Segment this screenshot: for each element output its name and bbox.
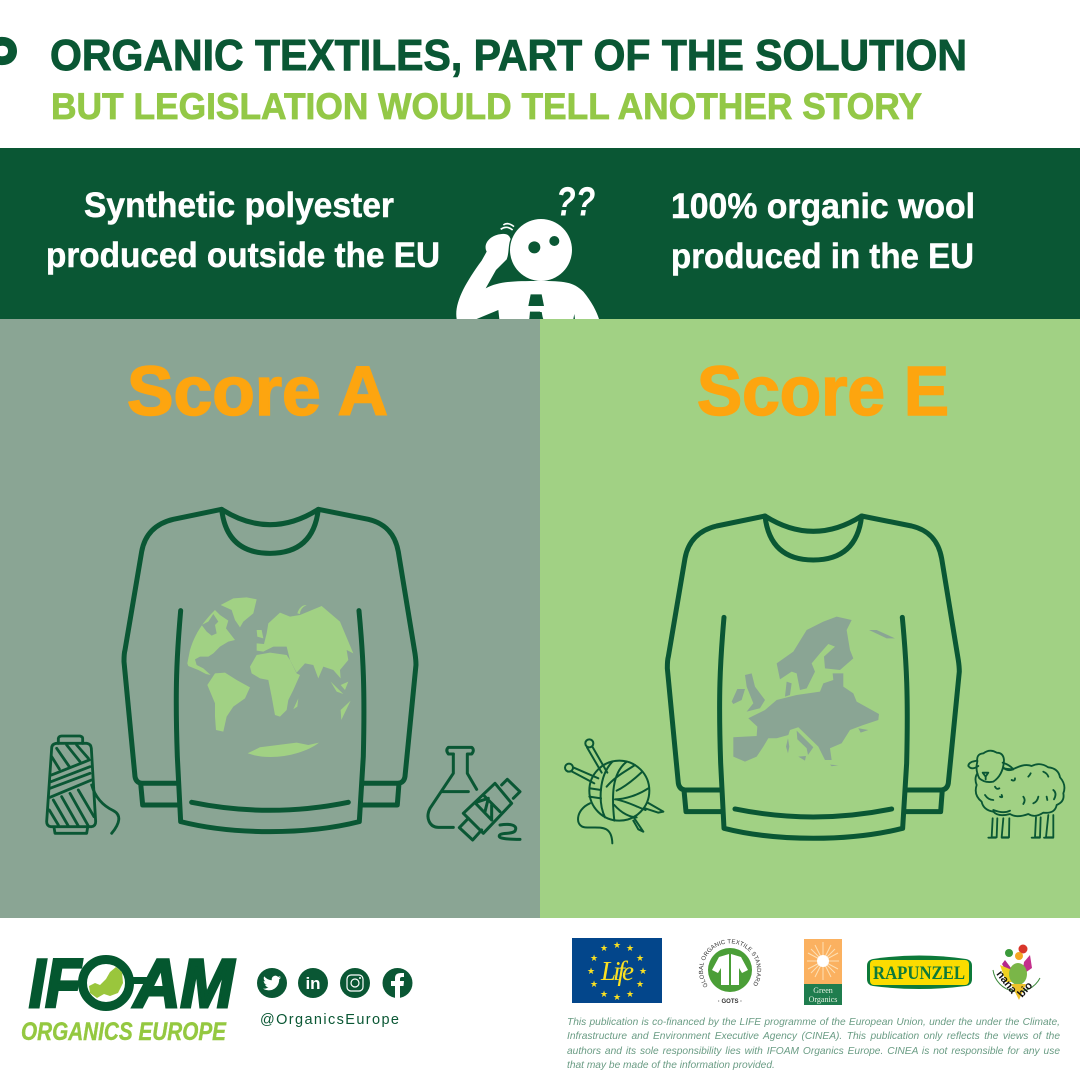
icon: yarn ball with needles xyxy=(565,739,663,843)
panel: Score E xyxy=(540,319,1080,918)
panel: Score A xyxy=(0,319,540,918)
header band xyxy=(0,148,1080,319)
logo: EU LIFE: ★ xyxy=(639,966,647,976)
band text: organic wool: produced in the EU xyxy=(671,237,974,276)
logo: Green Organics: Organics xyxy=(809,995,837,1004)
heading: Score E: Score E xyxy=(697,352,949,430)
logo: EU LIFE: ★ xyxy=(613,992,621,1002)
Europe map xyxy=(732,617,895,766)
sweater outline xyxy=(124,509,416,832)
heading: Score A: Score A xyxy=(127,352,388,430)
band text: organic wool: 100% organic wool xyxy=(671,187,975,226)
band text: synthetic polyester: produced outside the EU xyxy=(46,236,440,275)
icon: puzzled person xyxy=(456,179,599,319)
title: ORGANIC TEXTILES, PART OF THE SOLUTION xyxy=(50,31,967,80)
logo: Green Organics xyxy=(804,939,842,1005)
icon: flask and synthetic thread xyxy=(428,747,520,840)
logo: EU LIFE: Life xyxy=(600,956,634,986)
logo: IFOAM Organics Europe: AM xyxy=(132,945,235,1022)
sweater outline xyxy=(667,516,959,838)
logo: EU LIFE: ★ xyxy=(636,953,644,963)
logo: Rapunzel: RAPUNZEL xyxy=(873,963,965,984)
sweater with Europe map xyxy=(667,516,959,838)
band text: organic wool xyxy=(671,187,975,276)
icon: puzzled person: ?? xyxy=(556,179,595,225)
logo: IFOAM Organics Europe: IF xyxy=(29,945,83,1022)
logo: GOTS: · GOTS · xyxy=(718,999,742,1005)
world map xyxy=(187,597,353,757)
logo: EU LIFE: ★ xyxy=(590,953,598,963)
band text: synthetic polyester xyxy=(46,186,440,275)
icon: sheep xyxy=(968,751,1064,838)
logo: nana bio xyxy=(993,944,1040,1000)
icon: linkedin: in xyxy=(305,974,321,993)
logo: nana bio: nana xyxy=(994,968,1019,997)
sweater with world map xyxy=(124,509,416,832)
cropped logo fragment xyxy=(0,37,17,65)
logo: IFOAM Organics Europe: ORGANICS EUROPE xyxy=(21,1018,227,1046)
logo: EU LIFE: ★ xyxy=(613,940,621,950)
icon: thread spool xyxy=(47,736,119,833)
icon: facebook xyxy=(382,968,412,998)
logo: EU LIFE: ★ xyxy=(590,979,598,989)
logo: Rapunzel xyxy=(867,956,972,989)
logo: Green Organics: Green xyxy=(813,986,833,995)
subtitle: BUT LEGISLATION WOULD TELL ANOTHER STORY xyxy=(51,86,922,127)
logo: EU LIFE: ★ xyxy=(636,979,644,989)
icon: twitter xyxy=(257,968,287,998)
logo: nana bio: bio xyxy=(1015,980,1035,1000)
logo: EU LIFE: ★ xyxy=(600,943,608,953)
disclaimer text: This publication is co-financed by the LIFE programme of the European Union, under the under the Climate, Infrastructure and Environment Executive Agency (CINEA). This publication only reflects the views of the authors and its sole responsibility lies with IFOAM Organics Europe. CINEA is not responsible for any use that may be made of the information provided. xyxy=(567,1017,1060,1071)
social handle: @OrganicsEurope xyxy=(260,1012,399,1028)
logo: EU LIFE: ★ xyxy=(626,943,634,953)
logo: EU LIFE xyxy=(572,938,662,1003)
band text: synthetic polyester: Synthetic polyester xyxy=(84,186,394,225)
social icons xyxy=(257,968,412,998)
logo: GOTS: GLOBAL ORGANIC TEXTILE STANDARD xyxy=(698,939,762,988)
icon: instagram xyxy=(340,968,370,998)
icon: linkedin xyxy=(298,968,328,998)
logo: EU LIFE: ★ xyxy=(600,989,608,999)
logo: EU LIFE: ★ xyxy=(587,966,595,976)
logo: IFOAM Organics Europe xyxy=(21,945,235,1046)
logo: EU LIFE: ★ xyxy=(626,989,634,999)
